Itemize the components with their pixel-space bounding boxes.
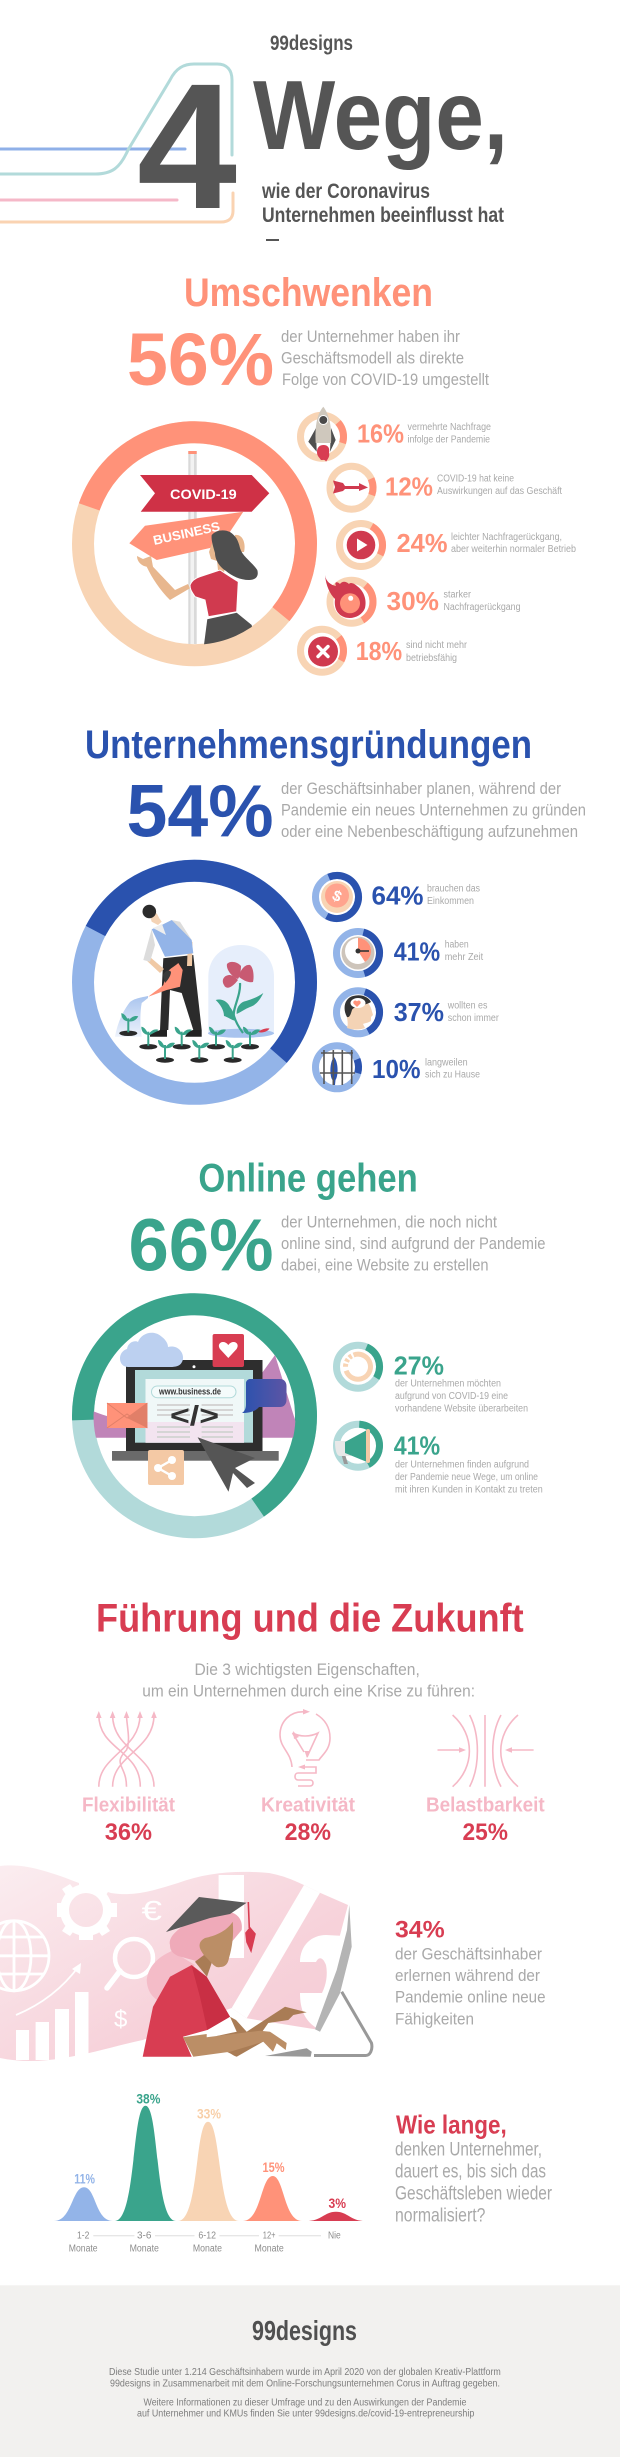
gear bbox=[60, 1884, 112, 1936]
intro text: oder eine Nebenbeschäftigung aufzunehmen bbox=[281, 822, 578, 841]
label: vorhandene Website überarbeiten bbox=[395, 1403, 528, 1414]
intro text bbox=[281, 327, 489, 389]
label bbox=[425, 1057, 480, 1081]
icon: clock bbox=[342, 936, 374, 970]
label: leichter Nachfragerückgang, bbox=[451, 532, 562, 543]
intro text: dabei, eine Website zu erstellen bbox=[281, 1256, 488, 1275]
stat 34% text: Pandemie online neue bbox=[395, 1988, 546, 2007]
section: Online gehen bbox=[79, 1157, 545, 1531]
ring 16% bbox=[300, 415, 344, 458]
code symbol: </> bbox=[170, 1400, 219, 1431]
ring 10% bbox=[316, 1046, 358, 1089]
intro text bbox=[142, 1660, 475, 1701]
laptop base bbox=[112, 1451, 279, 1461]
white chart and icons bbox=[16, 1875, 345, 2060]
label: schon immer bbox=[448, 1013, 499, 1024]
label: aber weiterhin normaler Betrieb bbox=[451, 544, 576, 555]
value: 27% bbox=[394, 1350, 444, 1380]
student cap bbox=[166, 1897, 247, 1932]
ring 18% bbox=[300, 629, 344, 672]
axis labels: 3-6 bbox=[137, 2231, 152, 2242]
speech bubble bbox=[242, 1379, 286, 1413]
trait: Flexibilität bbox=[82, 1711, 175, 1846]
value labels: 15% bbox=[262, 2159, 285, 2175]
illustration: laptop bbox=[90, 1333, 296, 1492]
stat 34% text: der Geschäftsinhaber bbox=[395, 1944, 542, 1963]
label: mehr Zeit bbox=[445, 952, 483, 963]
man bbox=[142, 905, 202, 1037]
value: 18% bbox=[356, 636, 402, 666]
label bbox=[395, 1379, 528, 1414]
intro text: der Unternehmer haben ihr bbox=[281, 327, 460, 346]
label: brauchen das bbox=[427, 884, 480, 895]
label bbox=[447, 1001, 499, 1024]
icon: coin: $ bbox=[329, 887, 345, 906]
section: Unternehmensgründungen bbox=[44, 723, 586, 1133]
axis labels: Monate bbox=[193, 2243, 222, 2254]
dollar: $ bbox=[114, 2006, 127, 2033]
heading: Umschwenken bbox=[184, 271, 433, 315]
icon: crossing arrows bbox=[96, 1711, 157, 1787]
face bbox=[200, 1922, 233, 1967]
label: Einkommen bbox=[427, 896, 474, 907]
footer notes bbox=[109, 2367, 501, 2420]
axis labels bbox=[69, 2231, 341, 2254]
label: der Unternehmen möchten bbox=[395, 1379, 501, 1390]
value: 28% bbox=[285, 1819, 331, 1846]
label: wollten es bbox=[447, 1001, 487, 1012]
donut chart 54% bbox=[44, 832, 345, 1133]
address bar: www.business.de bbox=[158, 1387, 221, 1397]
hair bbox=[147, 1912, 242, 2000]
value labels: 11% bbox=[74, 2170, 95, 2186]
icon: coin bbox=[321, 881, 353, 913]
illustration: man watering plants bbox=[115, 905, 274, 1063]
water stream bbox=[115, 996, 148, 1037]
heading: Online gehen bbox=[198, 1157, 418, 1201]
breakdown 30% bbox=[321, 571, 520, 632]
label bbox=[444, 590, 520, 613]
heading: Unternehmensgründungen bbox=[85, 723, 532, 767]
label: mit ihren Kunden in Kontakt zu treten bbox=[395, 1484, 543, 1495]
value: 37% bbox=[394, 997, 444, 1027]
label bbox=[451, 532, 576, 555]
footer notes: auf Unternehmer und KMUs finden Sie unter 99designs.de/covid-19-entrepreneurship bbox=[137, 2409, 475, 2420]
stat 34% text bbox=[395, 1916, 546, 2028]
subtitle bbox=[261, 180, 504, 227]
shirt bbox=[143, 1965, 230, 2057]
laptop screen bbox=[126, 1360, 262, 1451]
label: infolge der Pandemie bbox=[408, 435, 490, 446]
stat 66%: 66% bbox=[128, 1204, 274, 1287]
big number 4: 4 bbox=[137, 46, 237, 246]
pink wave background bbox=[0, 1865, 348, 2061]
label: sind nicht mehr bbox=[406, 640, 468, 651]
value labels: 38% bbox=[136, 2090, 161, 2106]
monitor stand bbox=[314, 1992, 372, 2056]
label: vermehrte Nachfrage bbox=[408, 422, 491, 433]
ring 37% bbox=[336, 991, 380, 1034]
label bbox=[445, 940, 483, 963]
label: der Unternehmen finden aufgrund bbox=[395, 1460, 529, 1471]
intro text: der Geschäftsinhaber planen, während der bbox=[281, 779, 561, 798]
cursor bbox=[198, 1437, 255, 1492]
flower bbox=[216, 962, 270, 1033]
icon: pressure arrows bbox=[438, 1715, 534, 1787]
globe bbox=[0, 1920, 49, 1991]
icon: cross bbox=[308, 636, 338, 666]
tassel bbox=[246, 1902, 255, 1951]
footer logo: 99designs bbox=[252, 2315, 357, 2346]
intro text bbox=[281, 779, 586, 841]
front arm bbox=[183, 2031, 287, 2057]
ring 41% bbox=[336, 932, 380, 974]
value: 12% bbox=[385, 472, 433, 502]
subtitle: wie der Coronavirus bbox=[261, 180, 430, 203]
intro text: Folge von COVID-19 umgestellt bbox=[282, 370, 489, 389]
share tile bbox=[148, 1450, 184, 1485]
label bbox=[406, 640, 468, 664]
illustration: woman with signpost bbox=[129, 451, 269, 650]
intro text: Geschäftsmodell als direkte bbox=[281, 348, 464, 368]
value labels bbox=[74, 2090, 346, 2211]
label: aufgrund von COVID-19 eine bbox=[395, 1391, 508, 1402]
stat 56%: 56% bbox=[127, 318, 274, 401]
question text: normalisiert? bbox=[395, 2206, 485, 2227]
intro text: um ein Unternehmen durch eine Krise zu führen: bbox=[142, 1682, 475, 1701]
footer notes: Weitere Informationen zu dieser Umfrage und zu den Auswirkungen der Pandemie bbox=[144, 2397, 467, 2408]
value: 24% bbox=[396, 528, 448, 558]
euro: € bbox=[142, 1895, 163, 1926]
value: 30% bbox=[386, 586, 439, 616]
label: Belastbarkeit bbox=[426, 1795, 545, 1817]
breakdown 41% bbox=[331, 926, 483, 980]
header bbox=[0, 32, 508, 246]
footer notes: 99designs in Zusammenarbeit mit dem Online-Forschungsunternehmen Corus in Auftrag gegeben. bbox=[110, 2378, 500, 2389]
label: langweilen bbox=[425, 1057, 468, 1068]
label: der Pandemie neue Wege, um online bbox=[395, 1472, 538, 1483]
value labels: 33% bbox=[197, 2106, 221, 2122]
question text: denken Unternehmer, bbox=[395, 2140, 542, 2161]
icon: megaphone bbox=[335, 1429, 370, 1464]
title: Wege,: Wege, bbox=[253, 60, 508, 170]
question text bbox=[395, 2109, 553, 2227]
ring 64% bbox=[316, 876, 358, 918]
heading: Führung und die Zukunft bbox=[96, 1597, 524, 1641]
section: Umschwenken bbox=[52, 271, 576, 686]
breakdown 41% online bbox=[335, 1422, 543, 1495]
label: starker bbox=[444, 590, 472, 601]
monitor bbox=[315, 1905, 352, 2032]
axis labels: 6-12 bbox=[198, 2231, 216, 2242]
magnifier bbox=[107, 1939, 153, 1988]
rear arm bbox=[217, 2007, 307, 2057]
axis labels: Nie bbox=[328, 2231, 341, 2242]
stat 34% text: Fähigkeiten bbox=[395, 2009, 474, 2028]
intro text: online sind, sind aufgrund der Pandemie bbox=[281, 1234, 546, 1253]
stat 34% text: 34% bbox=[395, 1916, 445, 1943]
ring 24% bbox=[340, 524, 382, 566]
breakdown 10% bbox=[309, 1040, 480, 1095]
growth arrow bbox=[16, 1966, 79, 2015]
envelope bbox=[107, 1403, 147, 1428]
intro text: der Unternehmen, die noch nicht bbox=[281, 1212, 497, 1231]
axis labels: 12+ bbox=[263, 2231, 276, 2242]
label: sich zu Hause bbox=[425, 1070, 480, 1081]
section: Führung und die Zukunft bbox=[0, 1597, 553, 2254]
ring 30% bbox=[330, 580, 373, 623]
trait: Belastbarkeit bbox=[426, 1715, 545, 1846]
donut chart 56% bbox=[52, 401, 337, 686]
illustration: woman with signpost: BUSINESS bbox=[152, 518, 222, 548]
label: Flexibilität bbox=[82, 1795, 175, 1817]
icon: prison bars bbox=[320, 1050, 355, 1085]
trait: Kreativität bbox=[261, 1709, 355, 1846]
question text: dauert es, bis sich das bbox=[395, 2162, 546, 2183]
ring 27% bbox=[336, 1345, 380, 1388]
value: 41% bbox=[394, 936, 440, 966]
seedlings bbox=[119, 1013, 260, 1063]
label: haben bbox=[445, 940, 469, 951]
icon: refresh arrow bbox=[341, 1350, 375, 1384]
label bbox=[408, 422, 491, 446]
breakdown 27% bbox=[329, 1338, 528, 1414]
question text: Wie lange, bbox=[396, 2109, 507, 2139]
value: 64% bbox=[372, 880, 424, 910]
footer bbox=[0, 2285, 620, 2457]
label bbox=[437, 474, 562, 497]
stat 54%: 54% bbox=[126, 770, 274, 853]
label bbox=[427, 884, 480, 907]
label: Nachfragerückgang bbox=[444, 602, 520, 613]
axis labels: 1-2 bbox=[77, 2231, 90, 2242]
axis labels: Monate bbox=[69, 2243, 98, 2254]
neck bbox=[195, 1955, 212, 1977]
breakdown 16% bbox=[292, 406, 491, 467]
icon: dart bbox=[333, 480, 368, 494]
heart tile bbox=[213, 1334, 244, 1367]
icon: fireball bbox=[325, 575, 368, 620]
bell curve chart bbox=[54, 2090, 366, 2254]
icon: head with heart bbox=[345, 995, 373, 1030]
breakdown 18% bbox=[292, 621, 468, 681]
label: betriebsfähig bbox=[406, 653, 457, 664]
footer notes: Diese Studie unter 1.214 Geschäftsinhabern wurde im April 2020 von der globalen Kreativ-Plattform bbox=[109, 2367, 501, 2378]
label bbox=[395, 1460, 543, 1495]
ring 41% bbox=[336, 1424, 380, 1467]
value: 41% bbox=[394, 1430, 440, 1460]
cloud bbox=[120, 1333, 183, 1367]
axis labels: Monate bbox=[254, 2243, 284, 2254]
donut chart 66% bbox=[79, 1300, 310, 1531]
icon: light bulb bbox=[280, 1709, 330, 1786]
value: 16% bbox=[357, 419, 404, 449]
breakdown 12% bbox=[323, 460, 562, 516]
keyboard bbox=[265, 2048, 312, 2057]
breakdown 24% bbox=[331, 515, 576, 575]
stat 34% text: erlernen während der bbox=[395, 1966, 540, 1985]
subtitle: Unternehmen beeinflusst hat bbox=[262, 204, 504, 227]
question text: Geschäftsleben wieder bbox=[395, 2184, 553, 2205]
value labels: 3% bbox=[328, 2195, 346, 2211]
axis labels: Monate bbox=[130, 2243, 159, 2254]
illustration: student at computer bbox=[0, 1865, 372, 2061]
label: COVID-19 hat keine bbox=[437, 474, 514, 485]
logo: 99designs: 99designs bbox=[270, 32, 353, 55]
header lines bbox=[0, 64, 233, 222]
label: Auswirkungen auf das Geschäft bbox=[437, 486, 562, 497]
icon: play bbox=[347, 531, 375, 559]
illustration: woman with signpost: COVID-19 bbox=[170, 486, 237, 502]
intro text bbox=[281, 1212, 546, 1275]
value: 10% bbox=[372, 1054, 420, 1084]
value: 25% bbox=[462, 1819, 508, 1846]
curves bbox=[54, 2106, 366, 2221]
purple backdrop bbox=[90, 1355, 296, 1438]
icon: rocket bbox=[308, 407, 336, 462]
label: Kreativität bbox=[261, 1795, 355, 1817]
intro text: Die 3 wichtigsten Eigenschaften, bbox=[194, 1660, 420, 1679]
value: 36% bbox=[105, 1819, 152, 1846]
breakdown 64% bbox=[309, 869, 480, 925]
dash bbox=[266, 239, 279, 241]
page placeholder lines bbox=[157, 1405, 233, 1437]
bell jar bbox=[208, 945, 274, 1034]
ring 12% bbox=[330, 466, 373, 509]
breakdown 37% bbox=[330, 985, 499, 1040]
